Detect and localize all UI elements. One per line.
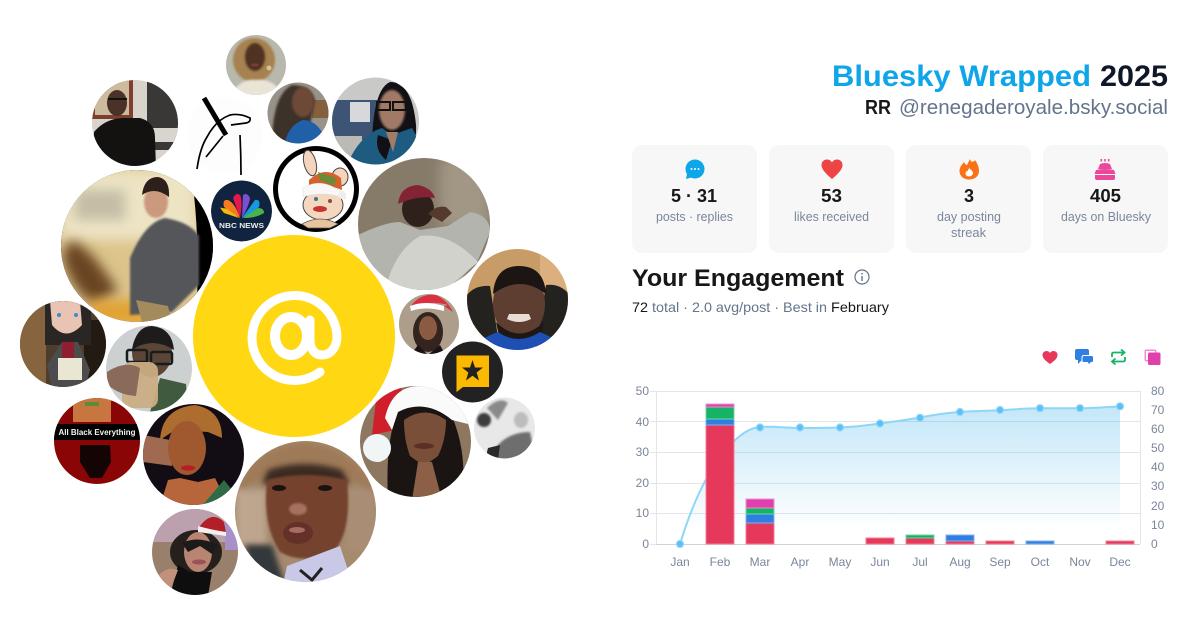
stat card: likes received	[769, 145, 894, 253]
avatar: All Black Everything logo	[54, 398, 140, 484]
chart legend icons	[1042, 349, 1160, 365]
avatar: man with glasses and black sweater	[92, 80, 178, 170]
stat card: day posting streak	[906, 145, 1031, 253]
icon: flame	[960, 159, 979, 180]
user name and handle: @renegaderoyale.bsky.social	[899, 97, 1168, 119]
stat card: days on Bluesky: 405	[1090, 186, 1121, 206]
right axis labels: 80	[1151, 384, 1165, 398]
grid lines	[650, 391, 1140, 544]
avatar: black and white photo	[474, 397, 536, 460]
avatar: doll figure	[20, 300, 108, 388]
title: Bluesky Wrapped	[832, 60, 1091, 93]
icon: heart	[822, 160, 842, 179]
month labels: Nov	[1069, 555, 1091, 569]
icon: reposts arrows	[1112, 350, 1125, 364]
stacked bars	[706, 404, 1134, 544]
avatar: man drinking from jar	[105, 325, 193, 413]
engagement summary	[632, 299, 889, 315]
bar: December	[1106, 541, 1134, 544]
left axis labels: 20	[636, 476, 649, 490]
month labels: Jul	[912, 555, 928, 569]
bar: August	[946, 535, 974, 544]
engagement summary: total · 2.0 avg/post · Best in	[652, 299, 827, 315]
avatar: man in denim shirt	[60, 170, 216, 325]
icon: info	[855, 270, 869, 284]
stat card: posts and replies: 5 · 31	[671, 186, 717, 206]
left axis labels: 0	[642, 537, 649, 551]
left axis labels: 10	[636, 506, 649, 520]
month labels: Apr	[791, 555, 809, 569]
bar: June	[866, 538, 894, 544]
right axis labels: 40	[1151, 460, 1165, 474]
icon: chat bubble	[686, 160, 704, 179]
bar: February	[706, 404, 734, 544]
month labels: Dec	[1109, 555, 1131, 569]
stat card: posts and replies: posts · replies	[656, 210, 733, 224]
avatar: man in red cap	[358, 158, 490, 290]
user name and handle: RR	[865, 97, 891, 119]
right axis labels: 60	[1151, 422, 1165, 436]
icon: likes heart	[1042, 351, 1058, 364]
at-sign badge	[193, 235, 395, 437]
bar: September	[986, 541, 1014, 544]
avatar: smiling man in leather chair	[467, 249, 570, 352]
avatar bubble cluster	[20, 35, 570, 596]
icon: birthday cake	[1094, 159, 1116, 180]
stat card: likes received: 53	[821, 186, 842, 206]
icon: quotes stacked squares	[1144, 350, 1160, 365]
stat card: days on Bluesky: days on Bluesky	[1061, 210, 1152, 224]
bar: March	[746, 499, 774, 544]
avatar: star speech bubble logo	[442, 342, 503, 402]
line points	[676, 403, 1124, 548]
avatar: bird sketch drawing	[187, 97, 263, 175]
stat card: day posting streak: day posting	[937, 210, 1001, 224]
cumulative line	[680, 406, 1120, 544]
stat card: day posting streak: 3	[964, 186, 974, 206]
month labels: Sep	[989, 555, 1011, 569]
engagement summary: 72	[632, 299, 648, 315]
right axis labels: 50	[1151, 441, 1165, 455]
bar: July	[906, 535, 934, 544]
month labels: Feb	[710, 555, 731, 569]
avatar: cartoon woman in santa hat	[360, 386, 472, 500]
avatar: All Black Everything logo: All Black Everything	[58, 428, 136, 437]
right axis labels: 70	[1151, 403, 1165, 417]
stat card: day posting streak: streak	[951, 226, 987, 240]
avatar: woman in santa hat	[398, 293, 460, 356]
icon: replies chat	[1075, 349, 1094, 365]
stat card: posts and replies	[632, 145, 757, 253]
month labels	[670, 555, 1131, 569]
left axis labels: 40	[636, 415, 649, 429]
avatar: woman in fur hood	[234, 440, 378, 584]
engagement summary: February	[831, 299, 889, 315]
right axis labels: 30	[1151, 479, 1165, 493]
avatar: woman in lace mask and santa hat	[151, 508, 239, 596]
right axis labels: 10	[1151, 518, 1165, 532]
left axis labels: 30	[636, 445, 649, 459]
title: 2025	[1100, 60, 1168, 93]
avatar: woman with glasses in living room	[332, 77, 420, 170]
avatar: woman in blue shirt	[267, 82, 330, 146]
left axis labels	[636, 384, 649, 551]
month labels: Jun	[870, 555, 890, 569]
stat card: likes received: likes received	[794, 210, 869, 224]
bar: October	[1026, 541, 1054, 544]
avatar: woman with auburn curls	[143, 404, 245, 510]
cumulative area	[680, 406, 1120, 544]
combo chart: monthly engagement bars and cumulative line	[636, 384, 1165, 569]
month labels: Mar	[750, 555, 770, 569]
right axis labels	[1151, 384, 1165, 551]
right axis labels: 0	[1151, 537, 1158, 551]
avatar: woman with blonde curls	[226, 35, 286, 96]
avatar: cartoon rabbit with santa hat	[273, 146, 359, 232]
avatar: NBC News logo: NBC NEWS	[219, 221, 264, 230]
stat card: days on Bluesky	[1043, 145, 1168, 253]
right axis labels: 20	[1151, 499, 1165, 513]
month labels: Aug	[949, 555, 971, 569]
month labels: Oct	[1031, 555, 1050, 569]
heading: Your Engagement: Your Engagement	[632, 265, 844, 292]
month labels: Jan	[670, 555, 690, 569]
month labels: May	[829, 555, 851, 569]
avatar: NBC News logo	[211, 180, 272, 242]
left axis labels: 50	[636, 384, 649, 398]
